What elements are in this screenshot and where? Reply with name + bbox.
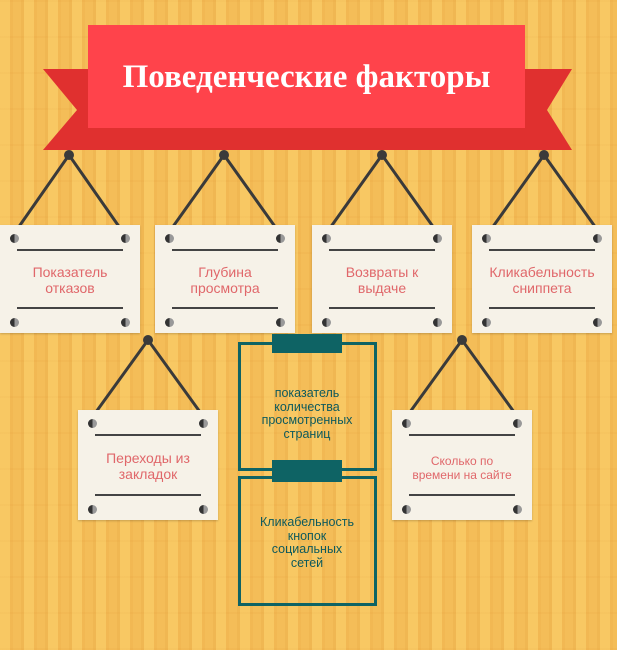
text: Кликабельность кнопок социальных сетей: [260, 515, 354, 570]
title text: Поведенческие факторы: [123, 59, 490, 95]
text: показатель количества просмотренных страниц: просмотренных: [262, 413, 352, 427]
board: Сколько по времени на сайте: Сколько по: [431, 454, 493, 468]
text: показатель количества просмотренных страниц: показатель: [275, 386, 339, 400]
board: Кликабельность сниппета: сниппета: [512, 280, 572, 296]
text: Кликабельность кнопок социальных сетей: Кликабельность: [260, 515, 354, 529]
board: Возвраты к выдаче: Возвраты к: [346, 264, 418, 280]
text: показатель количества просмотренных страниц: количества: [274, 400, 340, 414]
text: Кликабельность кнопок социальных сетей: социальных: [272, 542, 342, 556]
board: Глубина просмотра: просмотра: [190, 280, 260, 296]
board: Показатель отказов: [0, 225, 140, 333]
board: Кликабельность сниппета: Кликабельность: [489, 264, 595, 280]
text: показатель количества просмотренных страниц: [262, 386, 352, 440]
title ribbon: [43, 25, 572, 150]
text: показатель количества просмотренных страниц: страниц: [284, 426, 330, 440]
board: Кликабельность сниппета: [472, 225, 612, 333]
board: Переходы из закладок: закладок: [119, 466, 177, 482]
text: Кликабельность кнопок социальных сетей: сетей: [291, 556, 323, 570]
teal frames: [238, 334, 377, 606]
board: Возвраты к выдаче: [312, 225, 452, 333]
board: Показатель отказов: отказов: [45, 280, 95, 296]
board: Показатель отказов: Показатель: [33, 264, 107, 280]
board: Глубина просмотра: Глубина: [198, 264, 252, 280]
board: Возвраты к выдаче: выдаче: [358, 280, 406, 296]
board: Сколько по времени на сайте: [392, 410, 532, 520]
text: Кликабельность кнопок социальных сетей: кнопок: [288, 528, 326, 542]
board: Глубина просмотра: [155, 225, 295, 333]
board: Переходы из закладок: [78, 410, 218, 520]
board: Сколько по времени на сайте: времени на сайте: [412, 468, 512, 482]
board: Переходы из закладок: Переходы из: [106, 450, 190, 466]
